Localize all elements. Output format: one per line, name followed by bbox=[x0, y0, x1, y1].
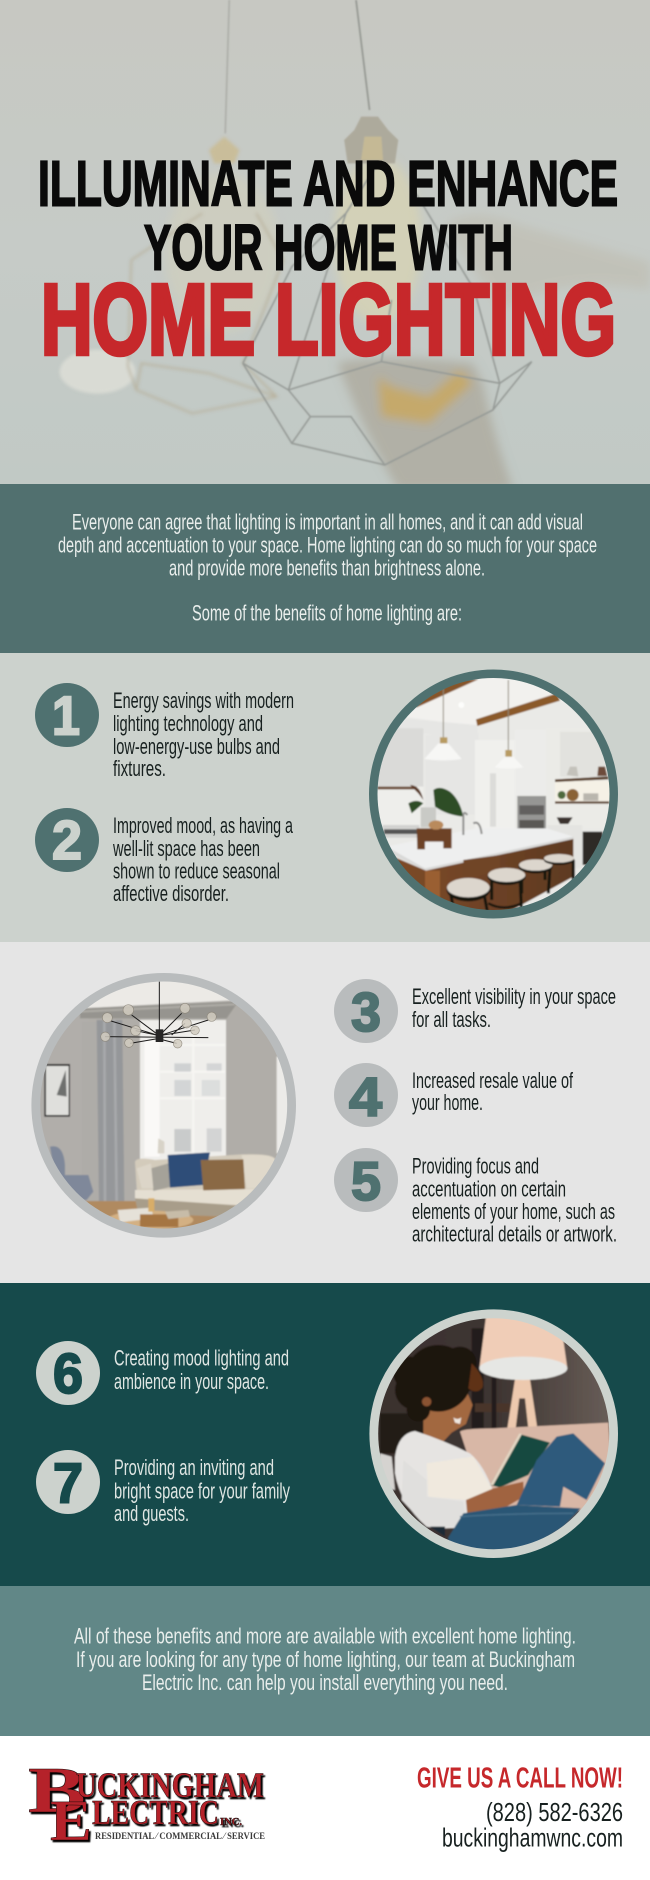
panel: intro bbox=[0, 484, 650, 653]
benefit 4 bbox=[334, 1063, 574, 1128]
benefit 1 text: fixtures. bbox=[113, 756, 166, 781]
conclusion text: Electric Inc. can help you install everything you need. bbox=[142, 1670, 508, 1695]
number badge 6 bbox=[36, 1341, 100, 1406]
number badge 4 bbox=[334, 1063, 398, 1128]
benefit 6 text bbox=[114, 1346, 289, 1394]
number badge 5 bbox=[334, 1148, 398, 1212]
number badge 7 bbox=[36, 1450, 100, 1516]
benefit 2 text: Improved mood, as having a bbox=[113, 813, 293, 838]
intro text: Some of the benefits of home lighting are: bbox=[192, 600, 462, 626]
benefit 6 text: Creating mood lighting and bbox=[114, 1346, 289, 1370]
title bbox=[38, 148, 618, 376]
number badge 5: 5 bbox=[351, 1150, 381, 1212]
benefit 7 text: Providing an inviting and bbox=[114, 1455, 274, 1480]
panel: conclusion bbox=[0, 1586, 650, 1736]
panel: benefits 6 and 7 bbox=[0, 1283, 650, 1587]
benefit 5 text: Providing focus and bbox=[412, 1154, 539, 1178]
number badge 7: 7 bbox=[53, 1452, 83, 1516]
benefit 5 text bbox=[412, 1154, 617, 1246]
benefit 7 text bbox=[114, 1455, 290, 1526]
chandelier bbox=[101, 982, 216, 1048]
panel: benefits 3 to 5 bbox=[0, 942, 650, 1284]
benefit 2 bbox=[35, 808, 293, 906]
benefit 7 text: and guests. bbox=[114, 1501, 189, 1526]
benefit 1 text: lighting technology and bbox=[113, 711, 263, 736]
benefit 3 text: for all tasks. bbox=[412, 1007, 491, 1032]
logo: Buckingham Electric Inc.: RESIDENTIAL ⁄ COMMERCIAL ⁄ SERVICE bbox=[95, 1831, 265, 1841]
benefit 6 bbox=[36, 1341, 289, 1406]
benefit 6 text: ambience in your space. bbox=[114, 1369, 269, 1394]
benefit 2 text: affective disorder. bbox=[113, 881, 229, 906]
benefit 3 bbox=[334, 979, 616, 1043]
benefit 7 text: bright space for your family bbox=[114, 1478, 290, 1504]
benefit 1 text bbox=[113, 688, 294, 781]
number badge 2 bbox=[35, 808, 99, 872]
logo: Buckingham Electric Inc.: B bbox=[28, 1754, 86, 1827]
number badge 6: 6 bbox=[53, 1342, 83, 1406]
logo: Buckingham Electric Inc. bbox=[28, 1754, 265, 1853]
number badge 1: 1 bbox=[52, 684, 80, 746]
number badge 2: 2 bbox=[52, 809, 82, 871]
conclusion text bbox=[74, 1624, 576, 1695]
benefit 1 text: Energy savings with modern bbox=[113, 688, 294, 713]
panel: hero bbox=[0, 0, 650, 490]
benefit 5 text: accentuation on certain bbox=[412, 1176, 566, 1202]
benefit 5 bbox=[334, 1148, 617, 1246]
woman reading photo circle bbox=[367, 1307, 623, 1563]
number badge 4: 4 bbox=[349, 1066, 382, 1128]
benefit 3 text bbox=[412, 984, 616, 1032]
logo: Buckingham Electric Inc.: INC. bbox=[220, 1816, 242, 1828]
benefit 2 text: shown to reduce seasonal bbox=[113, 858, 280, 884]
benefit 1 text: low-energy-use bulbs and bbox=[113, 734, 280, 759]
intro text: and provide more benefits than brightness alone. bbox=[169, 556, 485, 580]
intro text bbox=[58, 510, 597, 626]
logo: Buckingham Electric Inc.: LECTRIC bbox=[92, 1793, 219, 1832]
number badge 3: 3 bbox=[351, 981, 381, 1043]
hero photo: pendant lights and hand bbox=[60, 0, 650, 490]
benefit 4 text: your home. bbox=[412, 1090, 483, 1115]
benefit 4 text bbox=[412, 1068, 574, 1115]
benefit 7 bbox=[36, 1450, 290, 1526]
number badge 3 bbox=[334, 979, 398, 1043]
number badge 1 bbox=[35, 683, 99, 747]
living room photo circle bbox=[31, 972, 298, 1241]
kitchen photo circle bbox=[369, 670, 618, 918]
benefit 2 text: well-lit space has been bbox=[112, 836, 260, 861]
logo: Buckingham Electric Inc.: UCKINGHAM bbox=[76, 1765, 264, 1805]
panel: footer bbox=[0, 1736, 650, 1880]
benefit 1 bbox=[35, 683, 294, 781]
logo: Buckingham Electric Inc.: E bbox=[50, 1788, 92, 1853]
benefit 2 text bbox=[112, 813, 293, 906]
panel: benefits 1 and 2 bbox=[0, 653, 650, 942]
